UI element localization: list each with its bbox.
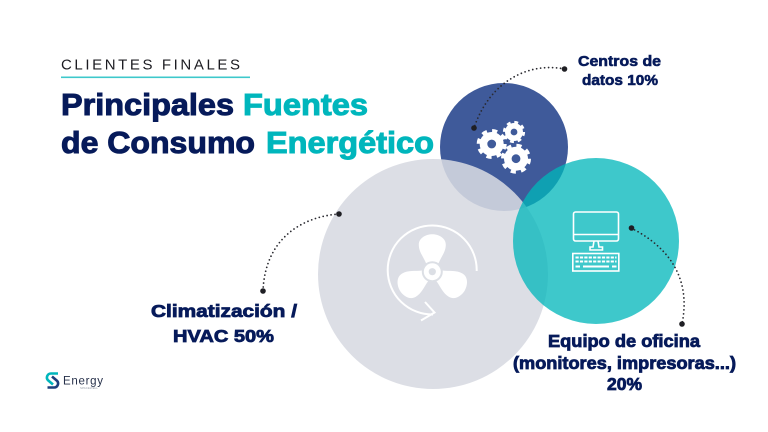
label: centros de datos 10%: Centros de — [578, 53, 661, 70]
icon: computer and keyboard — [573, 212, 619, 271]
icon: fan with rotation arrow — [388, 226, 477, 320]
circle: equipo de oficina — [513, 158, 679, 324]
title: Fuentes — [243, 88, 368, 122]
title: de Consumo — [61, 126, 255, 160]
title: Energético — [266, 126, 434, 160]
label: equipo de oficina 20%: 20% — [607, 374, 642, 394]
kicker: clientes finales: CLIENTES FINALES — [61, 56, 240, 74]
label: climatización / HVAC 50%: Climatización / — [151, 301, 297, 321]
label: equipo de oficina 20%: (monitores, impresoras...) — [513, 353, 736, 373]
label: climatización / HVAC 50% — [151, 301, 297, 346]
label: equipo de oficina 20%: Equipo de oficina — [548, 331, 700, 351]
circle: climatización — [318, 159, 548, 389]
title: Principales — [61, 88, 234, 122]
connector: centros de datos — [471, 66, 567, 131]
logo: energy — [47, 373, 103, 390]
label: centros de datos 10%: datos 10% — [582, 72, 658, 89]
circle: centros de datos — [440, 83, 568, 211]
logo: energy: SPACEWELL — [80, 386, 98, 390]
connector: climatización — [260, 211, 342, 294]
title — [61, 88, 434, 160]
label: climatización / HVAC 50%: HVAC 50% — [173, 326, 274, 346]
label: equipo de oficina 20% — [513, 331, 736, 394]
label: centros de datos 10% — [578, 53, 661, 89]
connector: equipo de oficina — [629, 225, 685, 327]
icon: gears — [478, 122, 529, 172]
logo: energy: Energy — [63, 376, 103, 388]
